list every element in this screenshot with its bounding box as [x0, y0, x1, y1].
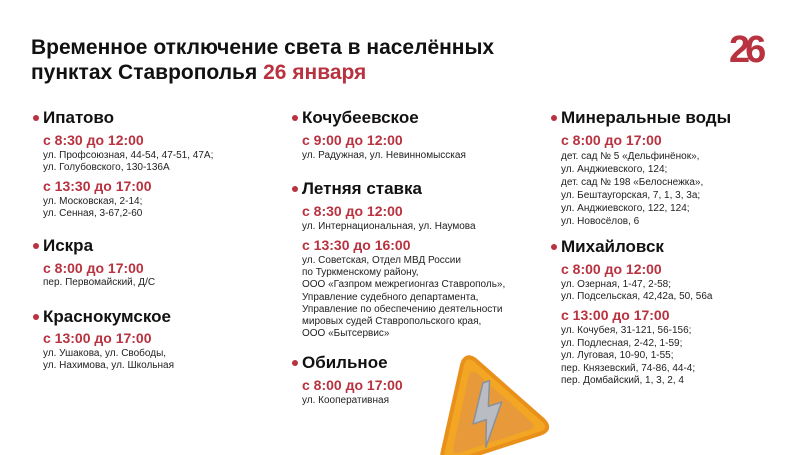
addresses: ул. Интернациональная, ул. Наумова	[302, 221, 476, 232]
time: с 8:00 до 17:00	[302, 377, 403, 393]
time: с 8:30 до 12:00	[43, 132, 144, 148]
heading: Ипатово: Ипатово	[43, 108, 114, 127]
addresses: ул. Подсельская, 42,42а, 50, 56а	[561, 291, 712, 302]
addresses: ул. Советская, Отдел МВД России	[302, 255, 461, 266]
addresses: ул. Кочубея, 31-121, 56-156;	[561, 325, 691, 336]
addresses: ООО «Бытсервис»	[302, 328, 389, 339]
addresses	[561, 325, 695, 386]
heading: Искра: Искра	[43, 236, 93, 255]
addresses: ул. Ушакова, ул. Свободы,	[43, 348, 166, 359]
addresses	[302, 255, 505, 339]
addresses: ул. Голубовского, 130-136А	[43, 162, 170, 173]
title: Временное отключение света в населённых	[31, 36, 494, 59]
addresses	[43, 196, 142, 219]
heading: Кочубеевское: Кочубеевское	[302, 108, 419, 127]
addresses: ООО «Газпром межрегионгаз Ставрополь»,	[302, 279, 505, 290]
time: с 13:30 до 16:00	[302, 237, 411, 253]
addresses	[43, 348, 174, 371]
addresses: по Туркменскому району,	[302, 267, 418, 278]
addresses: ул. Новосёлов, 6	[561, 216, 639, 227]
addresses: ул. Анджиевского, 124;	[561, 164, 667, 175]
addresses: пер. Домбайский, 1, 3, 2, 4	[561, 375, 684, 386]
column 1	[33, 108, 213, 371]
addresses: ул. Кооперативная	[302, 395, 389, 406]
addresses: ул. Анджиевского, 122, 124;	[561, 203, 690, 214]
addresses: ул. Московская, 2-14;	[43, 196, 142, 207]
heading: Обильное: Обильное	[302, 353, 388, 372]
addresses: пер. Князевский, 74-86, 44-4;	[561, 363, 695, 374]
addresses: Управление по обеспечению деятельности	[302, 304, 502, 315]
heading: Михайловск: Михайловск	[561, 237, 664, 256]
column 2	[292, 108, 505, 406]
heading: Летняя ставка: Летняя ставка	[302, 179, 422, 198]
addresses	[561, 151, 703, 227]
addresses: ул. Нахимова, ул. Школьная	[43, 360, 174, 371]
time: с 8:30 до 12:00	[302, 203, 403, 219]
addresses: пер. Первомайский, Д/С	[43, 277, 155, 288]
time: с 8:00 до 12:00	[561, 261, 662, 277]
addresses: дет. сад № 198 «Белоснежка»,	[561, 177, 703, 188]
addresses: мировых судей Ставропольского края,	[302, 316, 481, 327]
addresses	[561, 279, 712, 302]
time: с 8:00 до 17:00	[561, 132, 662, 148]
time: с 13:00 до 17:00	[561, 307, 670, 323]
addresses: ул. Радужная, ул. Невинномысская	[302, 150, 466, 161]
addresses: ул. Луговая, 10-90, 1-55;	[561, 350, 674, 361]
addresses: ул. Подлесная, 2-42, 1-59;	[561, 338, 682, 349]
addresses: ул. Бештаугорская, 7, 1, 3, 3а;	[561, 190, 700, 201]
time: с 13:30 до 17:00	[43, 178, 152, 194]
addresses	[43, 150, 213, 173]
time: с 13:00 до 17:00	[43, 330, 152, 346]
heading: Минеральные воды: Минеральные воды	[561, 108, 731, 127]
logo: 26: 26	[729, 29, 761, 71]
title	[31, 36, 494, 84]
title: пунктах Ставрополья 26 января	[31, 61, 366, 84]
column 3	[551, 108, 731, 386]
addresses: ул. Сенная, 3-67,2-60	[43, 208, 142, 219]
time: с 8:00 до 17:00	[43, 260, 144, 276]
addresses: Управление судебного департамента,	[302, 292, 478, 303]
addresses: ул. Профсоюзная, 44-54, 47-51, 47А;	[43, 150, 213, 161]
heading: Краснокумское: Краснокумское	[43, 307, 171, 326]
icon: warning triangle with lightning	[440, 355, 550, 455]
addresses: ул. Озерная, 1-47, 2-58;	[561, 279, 671, 290]
time: с 9:00 до 12:00	[302, 132, 403, 148]
addresses: дет. сад № 5 «Дельфинёнок»,	[561, 151, 699, 162]
